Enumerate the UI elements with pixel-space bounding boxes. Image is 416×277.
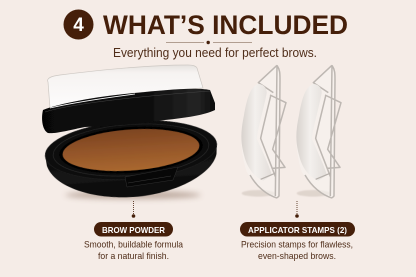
number badge bbox=[64, 10, 94, 40]
text: brow powder description bbox=[84, 240, 184, 262]
text: applicator stamps description bbox=[241, 240, 353, 262]
stamp 1 bbox=[241, 65, 286, 198]
label: applicator stamps: APPLICATOR STAMPS (2) bbox=[248, 225, 347, 235]
brow powder pan bbox=[61, 125, 201, 175]
connector: applicator stamps bbox=[295, 201, 299, 218]
label: brow powder bbox=[94, 222, 173, 236]
title: WHAT’S INCLUDED bbox=[103, 10, 348, 40]
product: brow powder compact bbox=[42, 65, 220, 203]
connector: brow powder bbox=[132, 201, 135, 218]
text: brow powder description: for a natural finish. bbox=[98, 251, 169, 262]
label: brow powder: BROW POWDER bbox=[102, 225, 165, 235]
product: applicator stamps bbox=[241, 65, 341, 198]
stamp 2 bbox=[296, 65, 341, 198]
hinge clasp bbox=[125, 167, 178, 187]
divider bbox=[166, 41, 252, 44]
text: brow powder description: Smooth, buildable formula bbox=[84, 240, 184, 250]
text: applicator stamps description: Precision stamps for flawless, bbox=[241, 240, 353, 250]
lid black ring bbox=[42, 89, 215, 133]
text: applicator stamps description: even-shaped brows. bbox=[258, 251, 336, 262]
label: applicator stamps bbox=[240, 222, 355, 236]
clear lid dome bbox=[48, 65, 203, 108]
compact base bbox=[43, 115, 220, 203]
compact shadow bbox=[65, 191, 201, 199]
number badge: 4 bbox=[73, 15, 84, 36]
subtitle: Everything you need for perfect brows. bbox=[113, 46, 317, 60]
